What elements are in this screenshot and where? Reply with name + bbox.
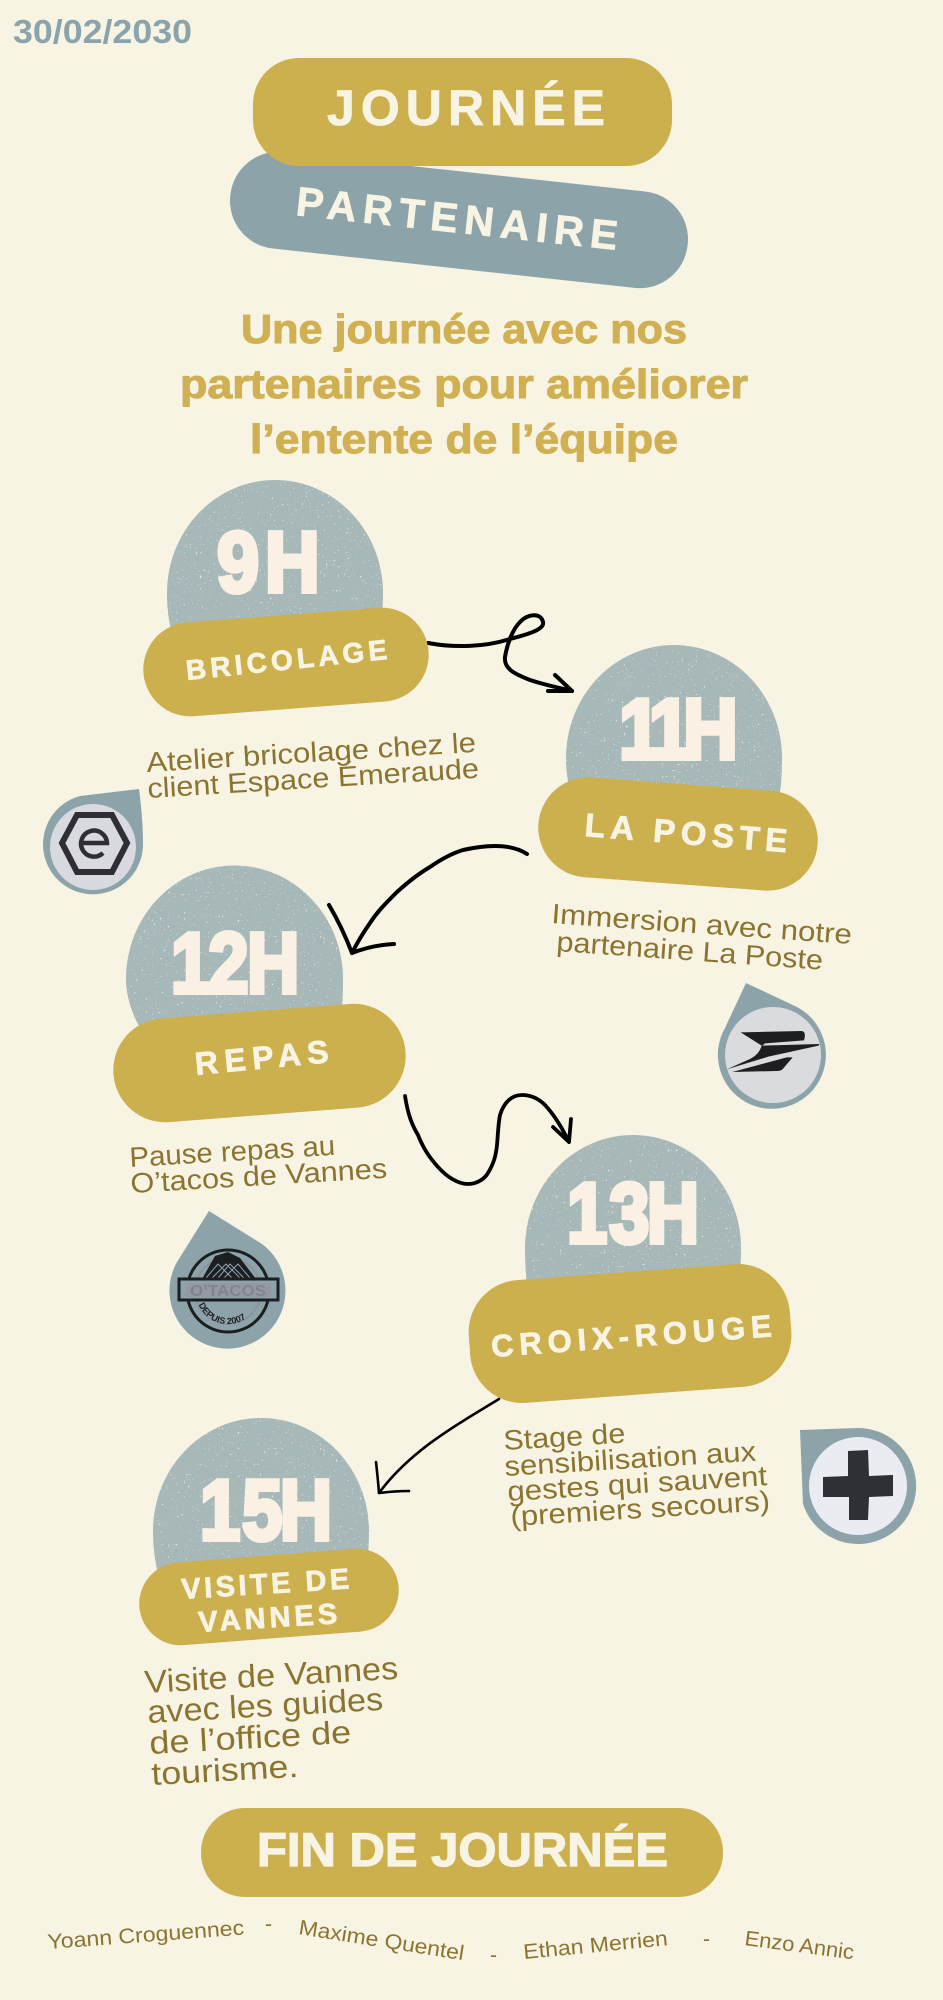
- icon: o'tacos logo: [169, 1211, 286, 1349]
- end of day pill: FIN DE JOURNÉE: [257, 1823, 668, 1876]
- arrow: 11h to 12h: [329, 846, 527, 953]
- label pill: VISITE DE: [180, 1564, 350, 1606]
- description: [502, 1418, 771, 1532]
- time blob: 11H: [619, 682, 738, 778]
- icon: o'tacos logo: O’TACOS: [190, 1283, 266, 1300]
- title pill: partenaire: PARTENAIRE: [294, 178, 620, 259]
- label pill: [136, 1546, 402, 1648]
- team names: Yoann Croguennec: [47, 1917, 245, 1954]
- description: Pause repas au: [129, 1130, 336, 1173]
- end of day pill: [201, 1808, 723, 1897]
- description: [143, 1650, 399, 1792]
- arrow: 13h to 15h: [376, 1399, 499, 1493]
- label pill: BRICOLAGE: [184, 634, 389, 686]
- time blob: 13H: [567, 1166, 699, 1261]
- team names: -: [703, 1928, 710, 1951]
- team names: -: [265, 1913, 272, 1936]
- team names: Enzo Annic: [743, 1927, 855, 1964]
- label pill: REPAS: [193, 1033, 330, 1082]
- time blob: [153, 1418, 369, 1590]
- label pill: [140, 604, 432, 720]
- date: 30/02/2030: [13, 13, 192, 50]
- description: tourisme.: [150, 1748, 299, 1792]
- description: gestes qui sauvent: [506, 1460, 768, 1507]
- label pill: [465, 1260, 795, 1407]
- title pill: partenaire: [225, 147, 693, 293]
- time blob: [566, 645, 782, 805]
- team names: Maxime Quentel: [297, 1916, 466, 1965]
- label pill: VANNES: [197, 1598, 338, 1639]
- time blob: [126, 865, 343, 1045]
- icon: o'tacos logo: DEPUIS 2007: [198, 1302, 244, 1324]
- subtitle: [180, 306, 748, 462]
- step: 11h la poste: [535, 645, 853, 1109]
- label pill: [535, 774, 821, 894]
- description: O’tacos de Vannes: [130, 1153, 388, 1199]
- subtitle: Une journée avec nos: [241, 306, 687, 352]
- title: [225, 58, 693, 293]
- time blob: 9H: [217, 515, 320, 611]
- label pill: [109, 1000, 410, 1126]
- description: client Espace Émeraude: [146, 753, 480, 804]
- time blob: 12H: [171, 916, 299, 1011]
- description: partenaire La Poste: [556, 926, 824, 976]
- time blob: 15H: [200, 1463, 332, 1558]
- description: Immersion avec notre: [551, 898, 853, 950]
- description: Atelier bricolage chez le: [145, 727, 477, 778]
- label pill: LA POSTE: [583, 806, 789, 859]
- arrow: 9h to 11h: [428, 615, 572, 691]
- subtitle: l’entente de l’équipe: [250, 416, 678, 462]
- team names: Ethan Merrien: [522, 1927, 669, 1964]
- team names: -: [490, 1944, 497, 1967]
- description: sensibilisation aux: [503, 1436, 757, 1482]
- description: [551, 898, 853, 976]
- description: de l’office de: [148, 1714, 352, 1761]
- step: 15h visite de vannes: [136, 1418, 402, 1792]
- time blob: [167, 480, 383, 645]
- description: Visite de Vannes: [143, 1650, 399, 1700]
- description: Stage de: [502, 1418, 626, 1456]
- time blob: [525, 1135, 741, 1310]
- icon: croix-rouge logo: [800, 1428, 916, 1544]
- description: [145, 727, 480, 804]
- subtitle: partenaires pour améliorer: [180, 361, 748, 407]
- title pill: journée: JOURNÉE: [327, 80, 605, 136]
- description: avec les guides: [146, 1681, 384, 1730]
- label pill: CROIX-ROUGE: [490, 1308, 773, 1364]
- icon: la poste logo: [718, 983, 826, 1109]
- step: 13h croix-rouge: [465, 1135, 916, 1544]
- step: 9h bricolage: [43, 480, 480, 894]
- description: [129, 1130, 388, 1199]
- team names: [47, 1913, 855, 1967]
- arrow: 12h to 13h: [405, 1095, 571, 1184]
- icon: espace emeraude logo: [43, 789, 143, 894]
- step: 12h repas: [113, 866, 406, 1349]
- description: (premiers secours): [509, 1485, 771, 1532]
- title pill: journée: [253, 58, 672, 166]
